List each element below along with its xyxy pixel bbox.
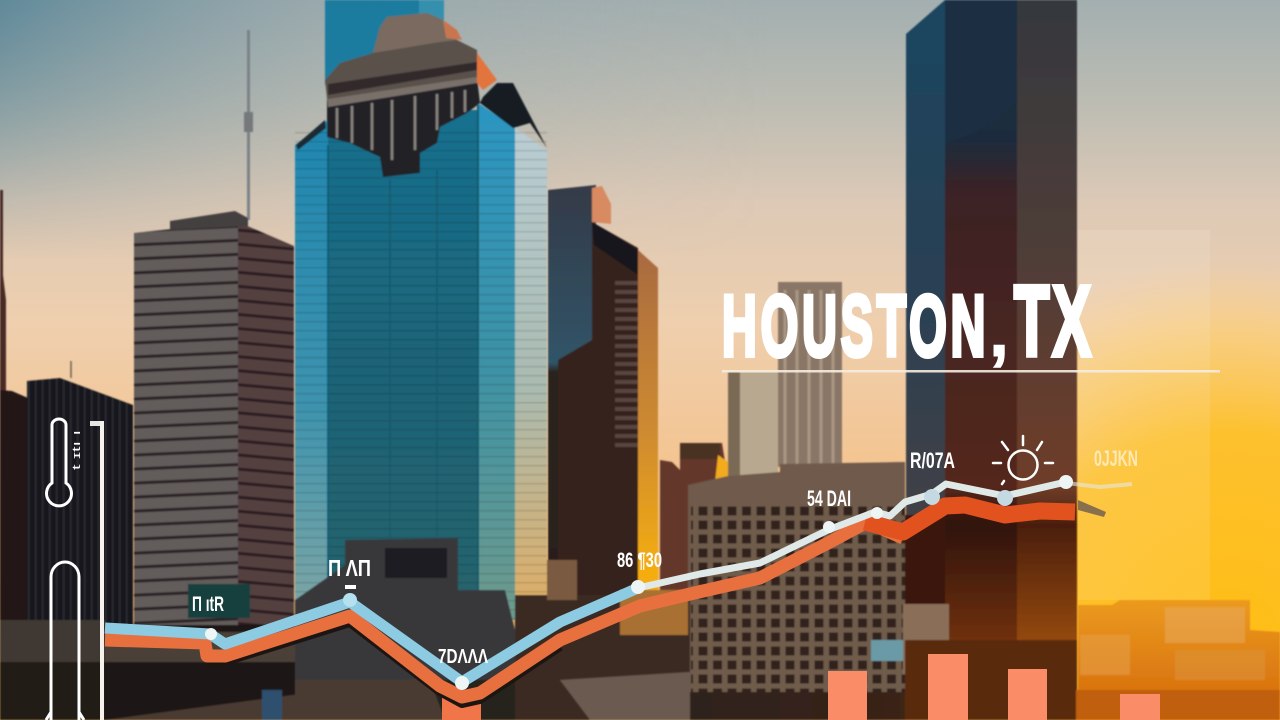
title: TX: [1014, 266, 1094, 378]
building: pale distant tower: [728, 282, 842, 477]
bar 3: [928, 654, 968, 720]
building: lobby block: [295, 538, 515, 680]
data label: Π ΛΠ: [328, 555, 371, 581]
scale tick label: t ɪtı ı: [71, 430, 83, 470]
data label: R/07A: [910, 448, 955, 473]
building: main blue glass tower: [295, 103, 547, 640]
title: [722, 266, 1094, 378]
data label: 54 DAI: [807, 486, 851, 511]
scale top mark: [90, 421, 100, 426]
title: ,: [989, 292, 1009, 372]
bar 2: [828, 671, 867, 720]
ground: highway and foreground: [0, 560, 1280, 720]
icon: small thermometer: [46, 419, 71, 506]
data label: 0JJKN: [1094, 446, 1138, 471]
building: low sunlit blocks: [1078, 600, 1280, 690]
translucent light panel: [1078, 230, 1210, 600]
building: rear blue tower: [325, 0, 444, 85]
line chart: orange series: [105, 522, 903, 697]
building: tall dark tower: [905, 0, 1077, 640]
building: mid dark tower: [548, 185, 658, 630]
bar 1: [442, 698, 481, 720]
bar 5: [1120, 694, 1160, 720]
line chart: pale series: [638, 482, 1066, 588]
chart data points: [205, 475, 1073, 690]
line chart: fading tail: [1066, 483, 1132, 487]
line chart: orange shadow: [207, 622, 560, 703]
building: grey annex and blue sign: [871, 604, 949, 674]
bar chart: [442, 654, 1160, 720]
building: wide grid-window block: [688, 462, 905, 692]
building: grey striped tower: [134, 211, 294, 625]
building: radio spire: [244, 30, 253, 220]
building: tower crown: [296, 13, 547, 177]
icon: thermometer bulb edges: [46, 712, 84, 720]
data label: 86 ¶30: [617, 549, 662, 572]
line chart: orange series right: [865, 505, 1075, 532]
building: dark striped block: [27, 378, 133, 625]
data label: Π ıtR: [192, 593, 224, 616]
scale axis: [100, 421, 104, 720]
icon: small bird or pointer: [1078, 500, 1106, 517]
building: far-left dark tower: [0, 190, 28, 625]
data label tick: [345, 585, 356, 589]
title underline: [722, 370, 1220, 372]
data label: 7DΛΛΛ: [438, 646, 488, 668]
building: small brown annex: [660, 443, 728, 630]
icon: distant crane: [70, 361, 72, 378]
bar 4: [1008, 669, 1047, 720]
line chart: light blue series: [105, 588, 638, 682]
title: HOUSTON: [722, 278, 989, 374]
icon: large thermometer: [51, 562, 79, 720]
icon: sun: [993, 436, 1053, 484]
